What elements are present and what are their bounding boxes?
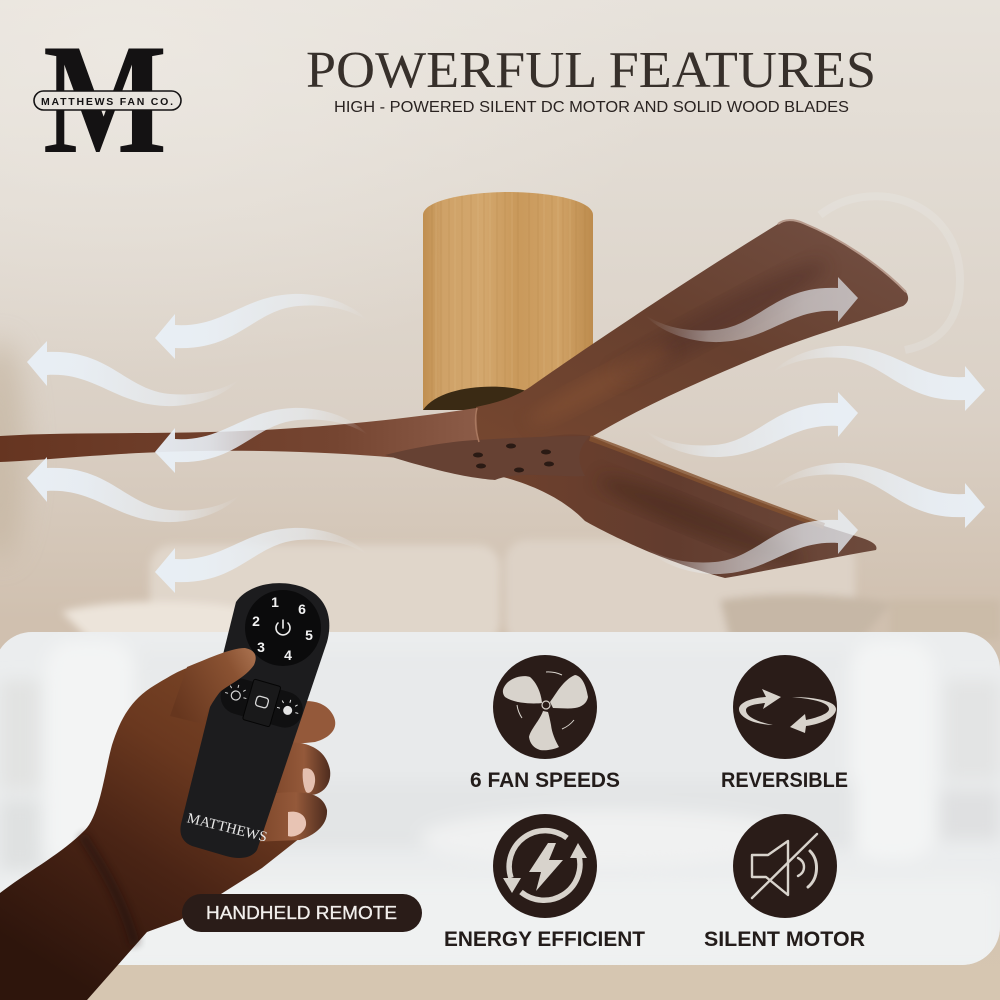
fan canopy: light wood cylinder [423,190,593,415]
icon: muted speaker [733,814,837,918]
thumb [170,648,256,724]
fan blades and hub [0,220,908,578]
blade streaks: upper [548,264,818,414]
hub plate [385,436,590,480]
arrow 4 [772,463,985,528]
feature: silent motor [704,814,865,951]
logo: Matthews Fan Co. monogram: MATTHEWS FAN CO. [41,96,173,108]
blade streaks: lower [605,478,797,566]
feature: energy efficient: ENERGY EFFICIENT [444,928,645,951]
feature: reversible: REVERSIBLE [721,769,848,792]
hub holes [473,444,554,472]
speed numbers: 2 [252,613,260,629]
power icon [276,620,290,635]
wrist crease shading [82,835,135,945]
feature: reversible [721,655,848,792]
remote in hand [0,583,335,1000]
icon: rotation arrows [733,655,837,759]
arrow 5 [155,528,368,593]
feature: 6 fan speeds: 6 FAN SPEEDS [470,769,620,792]
fingernail: ring [288,812,306,837]
airflow arrows, right side [645,277,985,574]
subtitle: HIGH - POWERED SILENT DC MOTOR AND SOLID WOOD BLADES [334,99,849,116]
speed numbers: 6 [298,601,306,617]
background: blurred sofa [62,540,1000,645]
fingernail: middle [303,768,315,793]
feature: silent motor: SILENT MOTOR [704,928,865,951]
feature: energy efficient [444,814,645,951]
arrow 5 on lower blade [645,509,858,574]
panel: frosted feature panel [0,632,1000,970]
label: handheld remote: HANDHELD REMOTE [206,903,397,923]
label: handheld remote [182,894,422,932]
arrow 3 [155,408,368,473]
arrow 2 [772,346,985,411]
finger: ring [250,792,327,842]
remote body [180,583,329,858]
speed numbers: 5 [305,627,313,643]
logo: Matthews Fan Co. monogram: M [43,12,167,187]
faint swirl behind blade [820,196,960,350]
speed numbers: 3 [257,639,265,655]
arrow 3 [645,392,858,457]
arrow 4 [27,457,240,522]
arrow 1 [155,294,368,359]
speed numbers: 4 [284,647,292,663]
speed dial [245,590,321,666]
blade: left [0,408,480,462]
feature: 6 fan speeds [470,655,620,792]
speed numbers [252,594,313,663]
finger: middle [265,742,330,795]
remote brand: MATTHEWS [185,810,269,846]
blade: upper right [476,220,908,440]
icon: fan [493,655,597,759]
airflow arrows, left side [27,294,368,593]
function buttons [216,671,308,735]
speed numbers: 1 [271,594,279,610]
arrow 1 on upper blade [645,277,858,342]
hand and arm [0,667,300,1000]
arrow 2 [27,341,240,406]
blade: lower right [470,434,876,578]
finger: index [285,701,335,745]
icon: bolt in cycle [493,814,597,918]
title: POWERFUL FEATURES [306,42,876,99]
